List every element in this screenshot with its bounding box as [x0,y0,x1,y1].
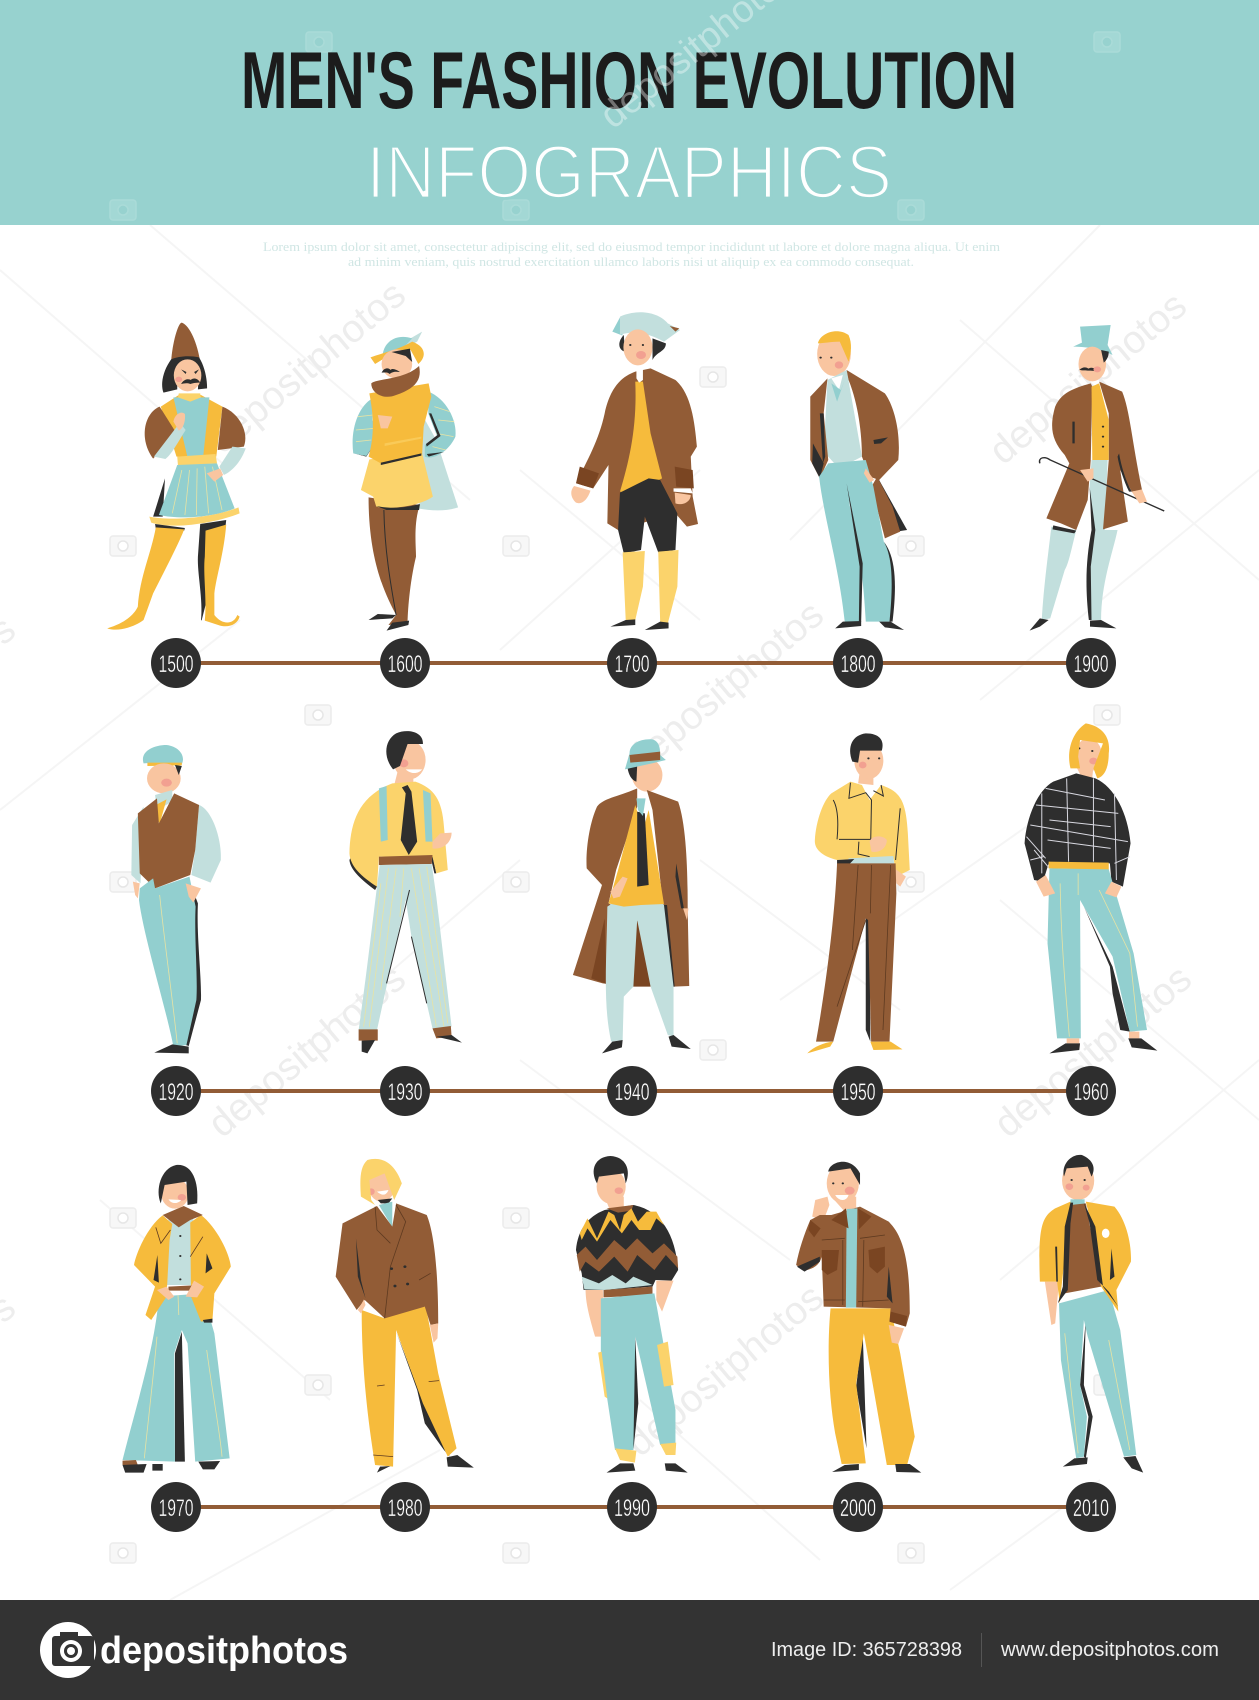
figure: 1950 [807,733,910,1053]
shirt [349,850,436,890]
trousers [396,1332,450,1457]
figure: 1930 [349,731,462,1053]
belt [168,1285,193,1291]
ruff [371,366,420,397]
head [147,763,181,793]
website: www.depositphotos.com [1000,1639,1219,1661]
head [1076,767,1093,785]
left leg [1042,527,1076,620]
timeline: row 1 [151,638,1116,688]
footer bar [0,1600,1259,1700]
hand [812,1197,829,1220]
watermark texts: depositphotos [618,593,832,782]
intro text [263,240,1000,269]
tunic [369,383,431,463]
trousers [359,864,452,1030]
trousers [866,918,870,1042]
shoes [607,1463,688,1473]
hands [571,486,691,504]
year 1940 [607,1066,657,1116]
inner shirt and tie [637,812,649,887]
year 1940: 1940 [614,1079,650,1106]
collar [1070,1199,1085,1205]
coat lining [626,913,656,987]
year 1500 [151,638,201,688]
hat [625,739,666,769]
belt [1049,862,1109,870]
image id: Image ID: 365728398 [771,1639,962,1661]
hands [1080,468,1147,503]
belt [604,1287,652,1297]
figure: 1940 [573,739,691,1053]
hand [610,877,688,920]
coat [573,788,637,987]
header camera watermarks [110,32,1120,220]
cap [143,745,183,764]
year 1990 [607,1482,657,1532]
shoes [362,1035,462,1053]
shoes [807,1042,902,1053]
trousers [1087,460,1118,620]
trousers [819,460,894,622]
hair [159,1165,197,1205]
figure: 1500 [107,323,246,630]
year 1900: 1900 [1074,651,1108,678]
subtitle: INFOGRAPHICS [366,130,892,214]
t-shirt [846,1208,857,1308]
year 2000 [833,1482,883,1532]
hands [157,1281,204,1300]
suspenders [379,786,432,842]
shoes [1049,1038,1157,1053]
vest [138,793,199,888]
top hat [1073,325,1113,355]
trousers [856,1332,867,1448]
year 1970: 1970 [158,1495,194,1522]
trousers [175,1332,185,1462]
year 1700: 1700 [614,651,650,678]
trousers [186,883,201,1046]
coat [576,368,698,530]
legs [155,520,226,621]
tie [401,785,417,855]
cuffs [359,1026,452,1041]
cane [1040,458,1164,511]
face [174,359,201,391]
coat [1046,383,1092,530]
undershirt [849,856,894,864]
header band [0,0,1259,225]
head [831,1197,856,1212]
belt [379,855,432,865]
sleeves [354,443,375,457]
trousers [1084,907,1130,1032]
shoes [377,1455,474,1473]
head [161,1178,189,1209]
hands [1036,875,1139,1043]
pockets and collar [808,1208,907,1327]
arms [586,1281,674,1337]
watermark texts [0,273,1200,1475]
figure: 2010 [1039,1155,1143,1473]
year 2010 [1066,1482,1116,1532]
figure: 1970 [123,1165,231,1473]
waistcoat [620,382,662,493]
intro text: Lorem ipsum dolor sit amet, consectetur adipiscing elit, sed do eiusmod tempor incididunt ut labore et dolore magna aliqua. Ut enim [263,240,1000,254]
head [367,1165,396,1202]
jacket [796,1207,910,1327]
neck and head [394,770,413,786]
year 1990: 1990 [614,1495,650,1522]
year 1960: 1960 [1074,1079,1108,1106]
year 1920 [151,1066,201,1116]
watermark texts: depositphotos [200,957,414,1146]
trousers [1080,1320,1093,1458]
figure: 1990 [576,1156,688,1473]
arms [1045,1282,1120,1325]
jacket [1039,1202,1070,1303]
hair [818,331,851,362]
year 1700 [607,638,657,688]
figure: 1700 [571,312,698,630]
shoes [610,619,669,630]
head [382,349,412,379]
year 1960 [1066,1066,1116,1116]
skirt [153,478,165,517]
waistcoat [824,370,862,468]
tunic [161,395,222,457]
face [623,329,652,365]
shoe [154,1044,189,1053]
figure: 1980 [336,1159,474,1473]
tricorn hat [612,317,623,336]
watermark texts: depositphotos [986,957,1200,1146]
timeline: row 3 [151,1482,1116,1532]
hand lower [889,1325,904,1344]
figure: 1920 [131,745,221,1053]
year 1920: 1920 [158,1079,194,1106]
hair [360,1159,402,1205]
hat [171,323,200,362]
year 1500: 1500 [158,651,194,678]
shirt [815,782,910,877]
hands [358,1299,438,1343]
jacket [134,1215,172,1320]
year 1800: 1800 [840,651,876,678]
icon: camera logo [40,1622,96,1678]
figure: 2000 [796,1162,921,1473]
year 1950 [833,1066,883,1116]
year 1600 [380,638,430,688]
legs [369,497,420,625]
brand name: depositphotos [100,1630,348,1672]
year 2010: 2010 [1073,1495,1109,1522]
inner collar [379,1202,392,1227]
figure: 1600 [353,332,458,631]
skirt [361,453,433,508]
pin [1102,1229,1110,1238]
figure: 1800 [810,331,907,630]
line [176,1505,1091,1509]
head [817,332,851,376]
year 1980 [380,1482,430,1532]
watermark texts: depositphotos [618,1276,832,1465]
shoes [835,621,904,630]
watermark texts: depositphotos [981,284,1195,473]
jacket [336,1203,438,1325]
year 1970 [151,1482,201,1532]
year 1600: 1600 [388,651,422,678]
year 2000: 2000 [840,1495,876,1522]
shoes [832,1464,921,1473]
intro text: ad minim veniam, quis nostrud exercitation ullamco laboris nisi ut aliquip ex ea commodo consequat. [348,255,914,269]
sleeves [145,407,176,459]
line [176,661,1091,665]
shirt [131,807,144,883]
figure: 1960 [1025,723,1157,1053]
watermark camera icons [110,367,1120,1563]
shirt [1065,1203,1101,1293]
year 1980: 1980 [388,1495,422,1522]
jacket [608,805,664,907]
timeline: row 2 [151,1066,1116,1116]
hair [619,335,666,360]
hair [828,1162,860,1185]
shirt [1025,773,1131,887]
trousers [631,1337,638,1450]
head [858,770,873,785]
year 1930 [380,1066,430,1116]
shirt [167,1217,193,1285]
hair [1063,1155,1094,1177]
head [605,1197,624,1212]
hair [162,356,207,393]
feathered hat [402,332,422,347]
hand [870,836,906,887]
stockings [623,550,679,623]
shoes [123,1460,138,1465]
cape [419,413,458,510]
figure: 1900 [1030,325,1164,631]
shoes [602,1035,691,1053]
head [632,758,662,792]
coat [810,378,828,478]
hair [594,1156,628,1183]
waistcoat [1092,383,1109,460]
sweater [576,1205,678,1290]
shoes [1063,1456,1143,1473]
hand [432,833,452,849]
shoes [369,614,409,631]
breeches [618,478,677,553]
year 1800 [833,638,883,688]
year 1930: 1930 [388,1079,422,1106]
hair [386,731,423,769]
year 1900 [1066,638,1116,688]
shoes [1030,618,1116,631]
trousers [606,886,674,1042]
hair [1069,723,1109,778]
head [1079,347,1106,381]
head [1062,1161,1094,1200]
belt [177,454,217,466]
line [176,1089,1091,1093]
watermark texts: depositphotos [200,273,414,462]
coat tail [873,477,907,533]
collar [163,1206,203,1227]
year 1950: 1950 [840,1079,876,1106]
hair [850,733,883,763]
hands [133,882,201,903]
